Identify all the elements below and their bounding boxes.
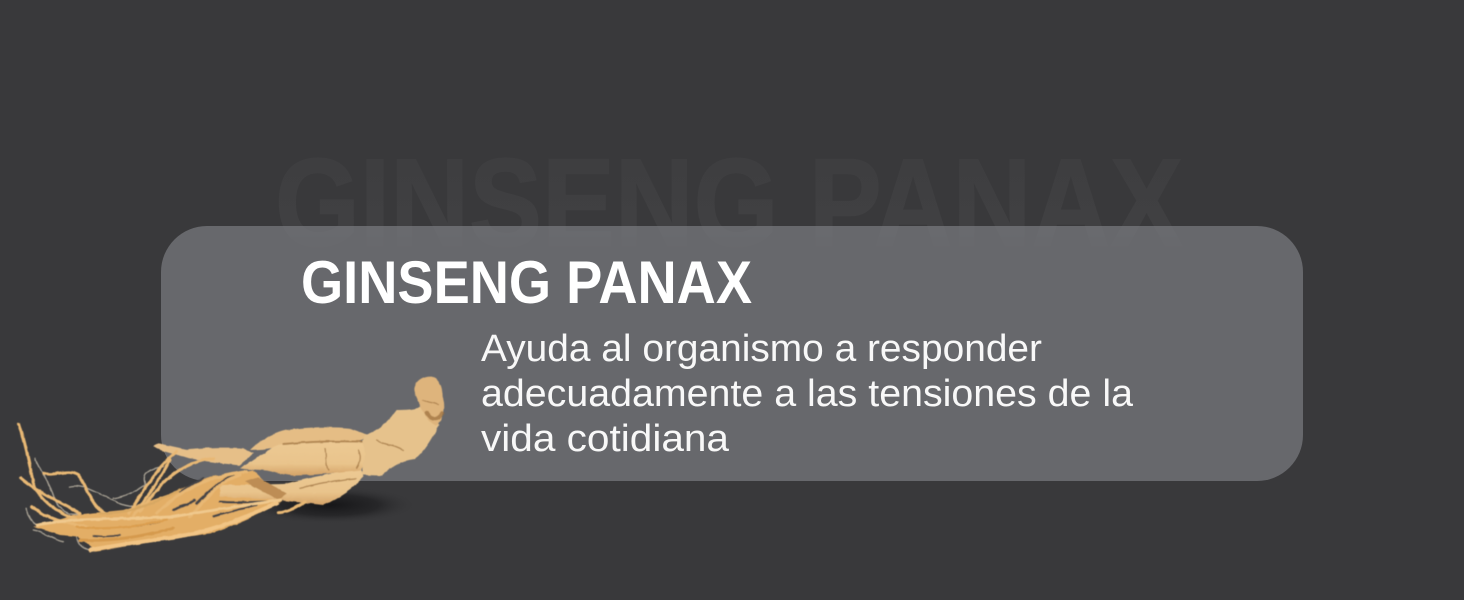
description text: vida cotidiana [481,418,730,460]
description text [481,328,1134,460]
upper branch [250,427,368,450]
shoulder and neck [362,407,439,476]
small crossing branch [245,477,287,500]
title: GINSENG PANAX [301,249,752,316]
description text: Ayuda al organismo a responder [481,328,1042,370]
panel [161,226,1303,481]
icon: ginseng root [19,377,444,552]
highlight strands [37,490,280,550]
root bundle base [33,470,283,552]
root shadow [242,486,418,524]
lower branch [220,468,364,505]
description text: adecuadamente a las tensiones de la [481,373,1134,415]
left arm [153,443,253,465]
head [414,377,444,426]
gaps in bundle [93,475,267,548]
fine grey rootlets [27,458,163,551]
long thin roots [19,423,305,527]
main body [240,441,367,476]
surface marks [283,400,443,488]
ghost heading: GINSENG PANAX [275,134,1183,273]
